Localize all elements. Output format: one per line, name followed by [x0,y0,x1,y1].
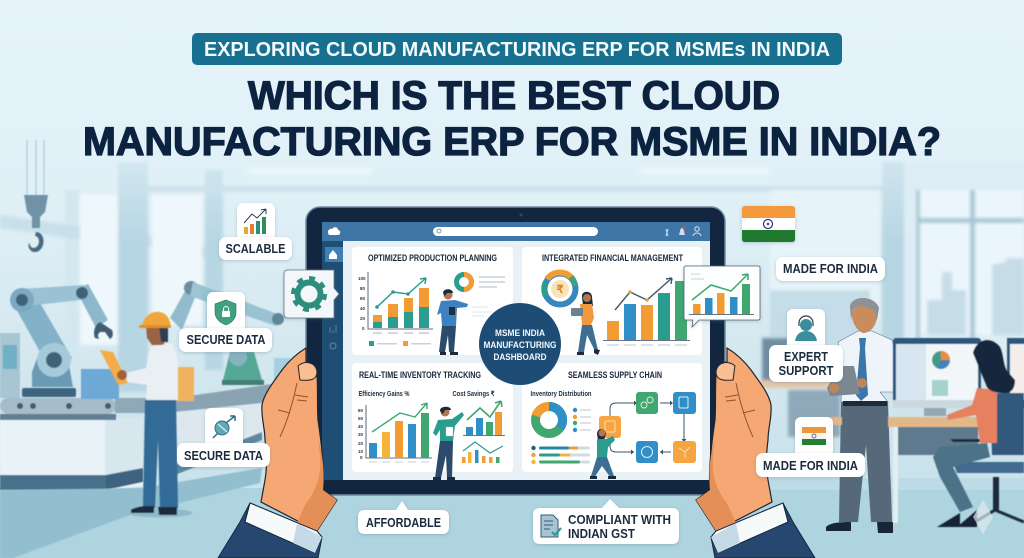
icon: document [541,515,561,537]
efficiency bar chart: 40 [358,424,364,429]
shoes [826,522,893,533]
label: made for india [776,257,885,281]
bar chart with trend [603,278,690,345]
presenter [437,289,468,355]
panel: real-time inventory tracking: Cost Savings ₹ [452,390,495,398]
tie [856,338,868,401]
efficiency bar chart [358,403,432,462]
factory: conveyor [0,333,272,490]
floor [0,488,1024,558]
label: affordable: AFFORDABLE [366,516,441,530]
efficiency bar chart: 50 [358,416,364,421]
efficiency bar chart: 30 [358,432,364,437]
small trend chart [462,442,503,463]
stacked bar chart: 100 [358,276,366,281]
callout: compliant with indian gst: INDIAN GST [568,527,635,541]
hard hat and head [128,312,192,518]
chair [990,393,1024,455]
center badge: dashboard: DASHBOARD [494,352,547,363]
belt [843,401,887,406]
factory: robot arm left [10,284,113,397]
panel: real-time inventory tracking [352,363,513,480]
icon: gear arrows [213,416,235,438]
callout: made for india with flag: MADE FOR INDIA [763,459,858,473]
callout: secure data second [177,408,270,467]
woman top [947,388,997,443]
cost bar chart [463,401,505,436]
panel: seamless supply chain: Inventory Distribution [530,391,592,398]
analyst [433,407,464,480]
callout: expert support [769,309,843,382]
rupee donut: ₹ [556,284,564,296]
icon: rising bars [244,209,266,234]
callout: growth chart [684,266,760,327]
center badge: dashboard [479,303,561,385]
progress bars [531,446,590,464]
head [852,304,877,333]
efficiency bar chart: 0 [360,455,363,460]
callout: made for india with flag [756,417,865,477]
woman pointing [590,429,616,479]
office: man presenter [826,298,907,533]
panel: optimized production planning: OPTIMIZED PRODUCTION PLANNING [368,253,497,263]
title: WHICH IS THE BEST CLOUD [248,74,780,118]
stacked bar chart: 60 [360,296,366,301]
desk [888,417,1024,427]
monitor [893,338,981,416]
badge: EXPLORING CLOUD MANUFACTURING ERP FOR MSMEs IN INDIA [204,39,830,61]
efficiency bar chart: 10 [358,449,364,454]
callout: scalable [219,203,292,260]
title [83,74,941,164]
panel: real-time inventory tracking: Efficiency Gains % [358,391,410,398]
shoes [131,506,177,515]
flag: india [742,206,795,242]
legend [573,408,591,432]
second monitor [1007,338,1024,408]
woman shoes [937,510,977,527]
panel: seamless supply chain [522,363,702,479]
stacked bar chart: 0 [362,326,365,331]
panel: integrated financial management: INTEGRATED FINANCIAL MANAGEMENT [542,253,683,263]
sidebar [322,241,343,480]
factory: robot arm right [170,281,290,388]
label: affordable [358,501,449,534]
flow diagram [599,392,696,463]
callout: gear [284,270,339,318]
panel: optimized production planning [352,247,513,355]
tablet and hands [827,366,860,396]
woman hair [973,340,1015,393]
trousers [839,402,892,522]
icon: flag [802,427,826,445]
icon: shield [215,300,236,325]
callout: scalable: SCALABLE [226,242,286,256]
shirt [126,343,178,400]
watermark star [973,500,993,534]
clipboard [100,350,128,385]
office: desk and woman with monitors [830,338,1024,527]
stacked bar chart: 40 [360,306,366,311]
callout: expert support: EXPERT [784,350,828,364]
floor shapes [0,468,262,558]
stacked bar chart: 20 [360,316,366,321]
badge [192,33,842,65]
rupee donut [544,272,576,304]
efficiency bar chart: 60 [358,408,364,413]
donut [536,406,563,434]
donut [456,274,505,316]
efficiency bar chart: 20 [358,441,364,446]
screen background [322,222,710,480]
left hand [218,348,337,558]
label: made for india: MADE FOR INDIA [783,262,878,276]
center badge: dashboard: MANUFACTURING [484,340,556,351]
title: MANUFACTURING ERP FOR MSME IN INDIA? [83,120,941,164]
panel: integrated financial management [522,247,702,355]
callout: compliant with indian gst: COMPLIANT WITH [568,513,671,527]
woman with laptop [571,292,600,355]
tablet [306,207,725,495]
callout: secure data second: SECURE DATA [184,449,263,463]
callout: secure data: SECURE DATA [186,333,266,347]
callout: compliant with indian gst [533,499,679,544]
woman legs [933,443,990,512]
right hand [696,348,815,558]
factory: hook [24,140,48,252]
icon: headset agent [795,316,817,341]
stacked bar chart: 80 [360,286,366,291]
stacked bar chart [358,272,433,346]
top bar [322,222,710,241]
callout: secure data [179,292,272,352]
hair [850,298,879,320]
callout: expert support: SUPPORT [778,364,834,378]
shirt [838,331,907,402]
trousers [143,400,178,508]
factory worker [100,312,192,518]
panel: seamless supply chain: SEAMLESS SUPPLY CHAIN [568,370,662,380]
panel: real-time inventory tracking: REAL-TIME INVENTORY TRACKING [359,370,481,380]
center badge: dashboard: MSME INDIA [495,328,545,339]
